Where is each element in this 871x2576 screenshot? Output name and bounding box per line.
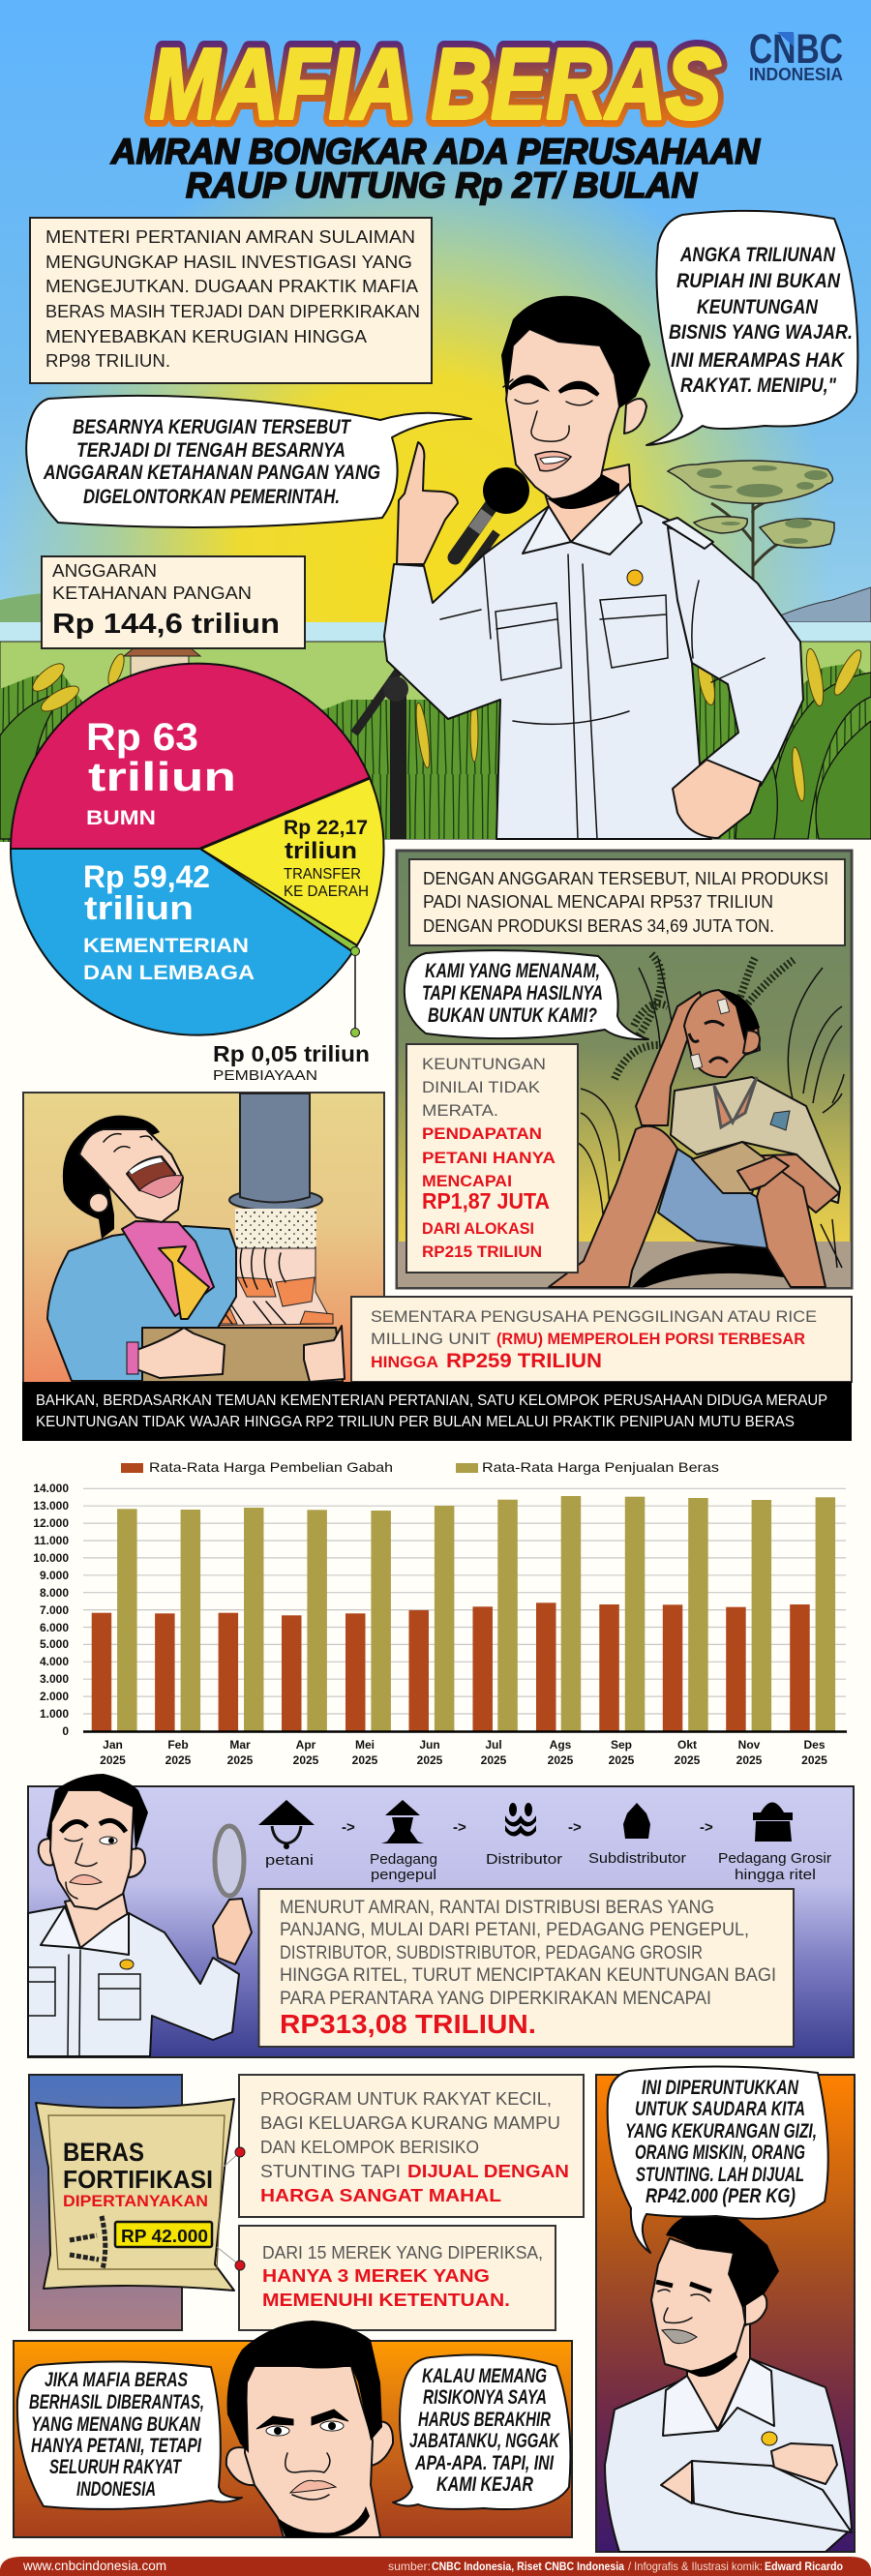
head xyxy=(684,990,760,1077)
other leg xyxy=(757,1171,826,1287)
text box: penggilingan: SEMENTARA PENGUSAHA PENGGILINGAN ATAU RICE xyxy=(371,1307,817,1326)
slice: kementerian dan lembaga xyxy=(11,849,355,1035)
x axis labels: 2025 xyxy=(736,1753,763,1767)
speech bubble: angka triliunan xyxy=(646,211,857,445)
mouth xyxy=(535,451,571,471)
speech bubble: besarnya kerugian: DIGELONTORKAN PEMERINTAH. xyxy=(83,486,340,508)
ear xyxy=(89,1193,108,1213)
panel: mafia beras diberantas xyxy=(14,2321,572,2537)
speech bubble: diperuntukkan: INI DIPERUNTUKKAN xyxy=(642,2077,799,2099)
badge xyxy=(120,1960,134,1969)
text box: rantai distribusi: PARA PERANTARA YANG DIPERKIRAKAN MENCAPAI xyxy=(280,1989,711,2009)
patch xyxy=(770,1111,790,1130)
nose xyxy=(503,379,569,441)
x axis labels: Mar xyxy=(229,1738,251,1752)
microphone stand xyxy=(354,532,496,839)
slice: pembiayaan xyxy=(200,849,370,1084)
money xyxy=(178,1248,333,1326)
x axis labels: 2025 xyxy=(801,1753,827,1767)
text box: rantai distribusi: MENURUT AMRAN, RANTAI DISTRIBUSI BERAS YANG xyxy=(280,1898,714,1918)
text box: 15 merek xyxy=(239,2226,556,2330)
black banner: temuan xyxy=(22,1382,852,1441)
text box: program rakyat kecil: DIJUAL DENGAN xyxy=(407,2161,569,2181)
minister portrait xyxy=(226,2321,393,2537)
flow icon: pedagang grosir: Pedagang Grosir xyxy=(718,1850,831,1867)
x axis labels: 2025 xyxy=(417,1753,443,1767)
eyebrows xyxy=(509,376,598,395)
text box: rantai distribusi: DISTRIBUTOR, SUBDISTRIBUTOR, PEDAGANG GROSIR xyxy=(280,1943,703,1963)
pipe xyxy=(229,1093,322,1211)
text box: program rakyat kecil: STUNTING TAPI xyxy=(260,2161,401,2181)
face xyxy=(651,2238,745,2374)
speech bubble: angka triliunan: ANGKA TRILIUNAN xyxy=(679,244,836,266)
text box: rantai distribusi: PANJANG, MULAI DARI PETANI, PEDAGANG PENGEPUL, xyxy=(280,1920,749,1940)
flow icon: pedagang pengepul xyxy=(370,1800,437,1883)
minister arms crossed xyxy=(605,2211,852,2552)
text box: program rakyat kecil: DAN KELOMPOK BERISIKO xyxy=(260,2137,479,2157)
speech bubble: angka triliunan: RUPIAH INI BUKAN xyxy=(676,270,841,292)
shirt xyxy=(122,1221,214,1316)
magnifier xyxy=(215,1826,244,1896)
eyes xyxy=(515,400,592,405)
x axis labels: 2025 xyxy=(293,1753,319,1767)
mouth xyxy=(290,2480,336,2493)
subtitle xyxy=(110,132,761,205)
text box: penggilingan xyxy=(351,1297,852,1382)
sleeve cuff xyxy=(127,1342,138,1374)
y axis labels: 8.000 xyxy=(40,1586,69,1600)
text box: keuntungan tidak merata: PENDAPATAN xyxy=(422,1124,542,1143)
speech bubble: diperuntukkan: ORANG MISKIN, ORANG xyxy=(635,2142,805,2164)
minister with magnifier xyxy=(28,1774,252,2056)
text box: keuntungan tidak merata xyxy=(406,1044,578,1273)
speech bubble: angka triliunan: INI MERAMPAS HAK xyxy=(671,349,846,372)
ears xyxy=(39,1839,145,1877)
placket xyxy=(68,1950,80,2056)
logo: CNBC Indonesia: CNBC xyxy=(749,26,843,73)
y axis labels: 9.000 xyxy=(40,1569,69,1582)
footer bar: sumber: xyxy=(388,2560,431,2573)
arrow: -> xyxy=(700,1819,713,1836)
x axis labels: Feb xyxy=(167,1738,189,1752)
x axis labels: Sep xyxy=(611,1738,632,1752)
jaw shadow xyxy=(685,2351,737,2377)
speech bubble: diperuntukkan: UNTUK SAUDARA KITA xyxy=(635,2098,805,2120)
text box: keuntungan tidak merata: DINILAI TIDAK xyxy=(422,1078,541,1096)
legend xyxy=(121,1459,719,1475)
eyes and eyebrows xyxy=(61,1820,126,1832)
rice bag: DIPERTANYAKAN xyxy=(63,2192,208,2210)
x axis labels: Jun xyxy=(419,1738,440,1752)
slice: transfer ke daerah: TRANSFER xyxy=(284,866,361,883)
price tag xyxy=(115,2222,212,2247)
hand under arm xyxy=(771,2443,837,2484)
slice: BUMN: triliun xyxy=(88,754,236,799)
text box: keuntungan tidak merata: RP1,87 JUTA xyxy=(422,1188,550,1213)
footer bar: / Infografis & Ilustrasi komik: xyxy=(628,2560,763,2573)
text box: intro: MENYEBABKAN KERUGIAN HINGGA xyxy=(45,327,367,346)
hand xyxy=(213,1899,252,1964)
text box: 15 merek: MEMENUHI KETENTUAN. xyxy=(262,2290,510,2310)
shirt body and left sleeve xyxy=(384,506,711,839)
hair xyxy=(666,2211,779,2308)
speech bubble: kalau memang: JABATANKU, NGGAK xyxy=(409,2430,560,2452)
speech bubble: diperuntukkan: RP42.000 (PER KG) xyxy=(646,2185,796,2207)
text box: intro: RP98 TRILIUN. xyxy=(45,351,170,371)
speech bubble: kami yang menanam: TAPI KENAPA HASILNYA xyxy=(422,982,603,1004)
rice plants xyxy=(0,647,871,842)
ears xyxy=(226,2421,393,2485)
rice bag: BERAS xyxy=(63,2138,144,2167)
speech bubble: kalau memang: KAMI KEJAR xyxy=(436,2473,534,2496)
ear xyxy=(743,1031,760,1053)
footer bar: www.cnbcindonesia.com xyxy=(22,2558,166,2573)
x axis labels: 2025 xyxy=(548,1753,574,1767)
x axis labels: 2025 xyxy=(675,1753,701,1767)
ear xyxy=(745,2292,766,2324)
arrow: -> xyxy=(342,1819,355,1836)
flow icon: subdistributor: Subdistributor xyxy=(588,1850,686,1867)
panel: diperuntukkan xyxy=(596,2066,855,2552)
speech bubble: jika mafia beras: HANYA PETANI, TETAPI xyxy=(31,2435,202,2457)
logo: CNBC Indonesia xyxy=(749,26,843,84)
text box: rantai distribusi: HINGGA RITEL, TURUT MENCIPTAKAN KEUNTUNGAN BAGI xyxy=(280,1965,776,1986)
callout: anggaran ketahanan pangan: Rp 144,6 triliun xyxy=(52,609,280,640)
tie xyxy=(159,1246,209,1319)
speech bubble: besarnya kerugian: TERJADI DI TENGAH BESARNYA xyxy=(76,439,345,462)
slice: kementerian dan lembaga: Rp 59,42 xyxy=(83,859,210,894)
text box: nilai produksi: PADI NASIONAL MENCAPAI RP537 TRILIUN xyxy=(423,892,773,912)
panel: rantai distribusi xyxy=(28,1774,854,2057)
speech bubble: diperuntukkan xyxy=(608,2066,828,2253)
subtitle: AMRAN BONGKAR ADA PERUSAHAAN xyxy=(110,132,761,171)
x axis labels: Jan xyxy=(103,1738,123,1752)
eyebrows and eyes xyxy=(656,2282,711,2291)
callout: anggaran ketahanan pangan: ANGGARAN xyxy=(52,561,157,581)
y axis labels: 10.000 xyxy=(33,1551,69,1565)
hills and mountain xyxy=(0,587,871,642)
text box: keuntungan tidak merata: KEUNTUNGAN xyxy=(422,1055,546,1073)
price tag: RP 42.000 xyxy=(121,2227,208,2246)
text box: penggilingan: HINGGA xyxy=(371,1353,438,1371)
text box: program rakyat kecil: BAGI KELUARGA KURANG MAMPU xyxy=(260,2112,560,2133)
y axis labels: 6.000 xyxy=(40,1621,69,1634)
face xyxy=(50,1790,134,1909)
flow icon: pedagang grosir xyxy=(718,1802,831,1883)
slice: transfer ke daerah: KE DAERAH xyxy=(284,884,369,900)
x axis labels: 2025 xyxy=(227,1753,254,1767)
speech bubble: jika mafia beras: YANG MENANG BUKAN xyxy=(31,2413,201,2436)
collar xyxy=(41,1906,129,1955)
speech bubble: diperuntukkan: STUNTING. LAH DIJUAL xyxy=(636,2164,804,2186)
speech bubble: besarnya kerugian xyxy=(26,396,471,527)
slice: pembiayaan: Rp 0,05 triliun xyxy=(213,1041,370,1066)
connector dots xyxy=(217,2147,245,2270)
text box: program rakyat kecil: HARGA SANGAT MAHAL xyxy=(260,2185,501,2205)
hair xyxy=(501,296,650,408)
legend: Rata-Rata Harga Penjualan Beras xyxy=(482,1459,719,1475)
title: Mafia Beras: MAFIA BERAS xyxy=(150,28,721,139)
shirt xyxy=(28,1906,239,2056)
text box: penggilingan: (RMU) MEMPEROLEH PORSI TERBESAR xyxy=(496,1330,805,1348)
falling rice xyxy=(235,1209,316,1282)
speech bubble: jika mafia beras: JIKA MAFIA BERAS xyxy=(45,2369,188,2391)
face xyxy=(506,329,619,506)
y axis labels: 1.000 xyxy=(40,1707,69,1721)
x axis labels: 2025 xyxy=(100,1753,126,1767)
flow icon: distributor xyxy=(486,1803,562,1868)
forearm xyxy=(636,992,704,1125)
text box: intro: MENGEJUTKAN. DUGAAN PRAKTIK MAFIA xyxy=(45,277,418,296)
callout: anggaran ketahanan pangan: KETAHANAN PANGAN xyxy=(52,584,252,603)
speech bubble: kalau memang: HARUS BERAKHIR xyxy=(418,2409,552,2431)
text box: intro: BERAS MASIH TERJADI DAN DIPERKIRAKAN xyxy=(45,302,420,321)
panel: hero scene background xyxy=(0,0,871,842)
x axis labels: Mei xyxy=(355,1738,375,1752)
slice: kementerian dan lembaga: DAN LEMBAGA xyxy=(83,962,255,984)
x axis labels: Des xyxy=(803,1738,826,1752)
pie chart: anggaran xyxy=(11,664,384,1084)
title: Mafia Beras: MAFIA BERAS xyxy=(150,28,721,139)
mouth xyxy=(662,2329,697,2344)
rock xyxy=(632,1245,791,1287)
y axis labels: 3.000 xyxy=(40,1672,69,1686)
right arm xyxy=(736,1154,839,1213)
collar xyxy=(663,2358,774,2436)
text box: keuntungan tidak merata: RP215 TRILIUN xyxy=(422,1243,542,1261)
arrow: -> xyxy=(568,1819,582,1836)
y axis labels: 5.000 xyxy=(40,1637,69,1651)
callout: anggaran ketahanan pangan xyxy=(42,556,305,648)
y axis labels: 7.000 xyxy=(40,1603,69,1617)
x axis labels xyxy=(100,1738,827,1767)
speech bubble: kami yang menanam: KAMI YANG MENANAM, xyxy=(425,960,600,982)
speech bubble: besarnya kerugian: ANGGARAN KETAHANAN PANGAN YANG xyxy=(43,462,380,484)
neck xyxy=(542,464,631,542)
slice: kementerian dan lembaga: KEMENTERIAN xyxy=(83,935,249,957)
speech bubble: jika mafia beras: BERHASIL DIBERANTAS, xyxy=(29,2391,204,2413)
x axis labels: 2025 xyxy=(481,1753,507,1767)
minister illustration xyxy=(384,296,803,839)
nose xyxy=(285,2453,330,2472)
rice field ground xyxy=(0,642,871,839)
x axis labels: Okt xyxy=(677,1738,697,1752)
footer bar: CNBC Indonesia, Riset CNBC Indonesia xyxy=(432,2560,624,2573)
flow icon: pedagang grosir: hingga ritel xyxy=(735,1867,816,1883)
text box: intro: MENTERI PERTANIAN AMRAN SULAIMAN xyxy=(45,227,415,247)
flow icon: petani xyxy=(258,1800,315,1869)
panel: petani xyxy=(397,851,852,1288)
text box: keuntungan tidak merata: DARI ALOKASI xyxy=(422,1219,534,1238)
eyebrows xyxy=(256,2410,348,2429)
speech bubble: jika mafia beras: INDONESIA xyxy=(76,2478,156,2501)
crossed forearm xyxy=(692,2461,852,2532)
ear xyxy=(624,399,646,434)
flow icon: distributor: Distributor xyxy=(486,1851,562,1868)
text box: program rakyat kecil xyxy=(239,2075,584,2217)
hair xyxy=(46,1774,148,1851)
house xyxy=(124,643,200,675)
flow icon: subdistributor xyxy=(588,1803,686,1867)
shirt xyxy=(671,1077,840,1203)
arrow: -> xyxy=(453,1819,466,1836)
slice: transfer ke daerah: triliun xyxy=(285,838,357,864)
eyes xyxy=(104,1134,152,1152)
text box: keuntungan tidak merata: PETANI HANYA xyxy=(422,1149,556,1167)
neck xyxy=(687,2322,750,2429)
text box: nilai produksi xyxy=(409,859,845,945)
speech bubble: kalau memang: APA-APA. TAPI, INI xyxy=(414,2452,555,2474)
collar xyxy=(523,484,642,554)
x axis labels: 2025 xyxy=(609,1753,635,1767)
y axis labels: 11.000 xyxy=(34,1534,69,1547)
text box: penggilingan: MILLING UNIT xyxy=(371,1330,491,1348)
x axis labels: Ags xyxy=(550,1738,572,1752)
face xyxy=(79,1129,183,1222)
raised leg xyxy=(549,1126,677,1287)
speech bubble: angka triliunan: RAKYAT. MENIPU," xyxy=(680,374,837,397)
rice bag: FORTIFIKASI xyxy=(63,2165,213,2194)
speech bubble: angka triliunan: KEUNTUNGAN xyxy=(697,296,819,318)
badge xyxy=(627,570,643,585)
text box: rantai distribusi: RP313,08 TRILIUN. xyxy=(280,2009,536,2039)
x axis labels: 2025 xyxy=(165,1753,192,1767)
speech bubble: kalau memang xyxy=(393,2354,570,2509)
face details xyxy=(689,1021,728,1063)
speech bubble: kami yang menanam: BUKAN UNTUK KAMI? xyxy=(428,1004,597,1027)
hand on book xyxy=(737,1156,789,1190)
series: pembelian gabah xyxy=(92,1603,810,1731)
flow icon: pedagang pengepul: pengepul xyxy=(371,1867,436,1883)
speech bubble: kalau memang: RISIKONYA SAYA xyxy=(423,2386,547,2409)
y axis labels: 4.000 xyxy=(40,1655,69,1668)
speech bubble: besarnya kerugian: BESARNYA KERUGIAN TERSEBUT xyxy=(73,416,352,438)
jaw shadow xyxy=(547,474,619,509)
x axis labels: Apr xyxy=(296,1738,316,1752)
open mouth xyxy=(127,1156,175,1193)
footer bar: Edward Ricardo xyxy=(765,2560,843,2573)
series: penjualan beras xyxy=(117,1496,835,1731)
hands xyxy=(136,1328,225,1378)
neckline xyxy=(714,1077,757,1127)
speech bubble: kami yang menanam xyxy=(405,950,648,1039)
speech bubble: kalau memang: KALAU MEMANG xyxy=(422,2365,547,2387)
legend: Rata-Rata Harga Pembelian Gabah xyxy=(149,1459,393,1475)
speech bubble: jika mafia beras: SELURUH RAKYAT xyxy=(49,2456,183,2478)
flow icon: pedagang pengepul: Pedagang xyxy=(370,1851,437,1868)
nose xyxy=(664,2308,692,2322)
y axis labels: 13.000 xyxy=(33,1499,69,1513)
slice: BUMN: BUMN xyxy=(86,807,156,829)
black banner: temuan: BAHKAN, BERDASARKAN TEMUAN KEMENTERIAN PERTANIAN, SATU KELOMPOK PERUSAHAAN DIDUGA MERAUP xyxy=(36,1393,827,1409)
x axis labels: 2025 xyxy=(352,1753,378,1767)
shirt xyxy=(605,2358,852,2552)
y axis labels: 2.000 xyxy=(40,1690,69,1703)
slice: kementerian dan lembaga: triliun xyxy=(84,890,194,927)
tongue xyxy=(139,1176,183,1198)
slice: BUMN xyxy=(11,664,370,849)
subtitle: RAUP UNTUNG Rp 2T/ BULAN xyxy=(186,165,698,205)
slice: transfer ke daerah: Rp 22,17 xyxy=(284,817,368,839)
rice bag xyxy=(36,2099,234,2291)
footer bar xyxy=(0,2557,871,2576)
y axis labels: 14.000 xyxy=(33,1482,69,1495)
right hand xyxy=(673,760,761,838)
hair xyxy=(227,2321,382,2453)
text box: penggilingan: RP259 TRILIUN xyxy=(446,1350,602,1372)
text box: intro xyxy=(30,218,432,383)
neck xyxy=(65,1892,129,1948)
book xyxy=(692,1142,765,1193)
text box: keuntungan tidak merata: MERATA. xyxy=(422,1101,498,1120)
jacket xyxy=(47,1226,236,1381)
shirt placket and creases xyxy=(440,554,765,839)
logo: CNBC Indonesia: INDONESIA xyxy=(749,65,843,84)
text box: nilai produksi: DENGAN PRODUKSI BERAS 34,69 JUTA TON. xyxy=(423,916,774,936)
ground xyxy=(398,1242,851,1287)
panel: pengusaha xyxy=(23,1093,384,1383)
panel: beras fortifikasi xyxy=(29,2075,234,2330)
y axis labels: 0 xyxy=(62,1724,69,1738)
y axis labels: 12.000 xyxy=(33,1516,69,1530)
farmer illustration xyxy=(549,990,840,1288)
slice: BUMN: Rp 63 xyxy=(86,716,198,759)
slice: pembiayaan: PEMBIAYAAN xyxy=(213,1067,317,1084)
pockets xyxy=(28,1967,140,2020)
microphone xyxy=(455,467,529,557)
hair xyxy=(63,1116,160,1239)
badge xyxy=(762,2432,777,2445)
text box: program rakyat kecil: PROGRAM UNTUK RAKYAT KECIL, xyxy=(260,2088,552,2109)
flow icon: petani: petani xyxy=(265,1852,314,1869)
x axis labels: Nov xyxy=(738,1738,761,1752)
text box: rantai distribusi xyxy=(259,1889,794,2047)
hair xyxy=(719,990,760,1045)
epaulet xyxy=(663,518,713,549)
raised hand xyxy=(397,442,458,564)
nose and mouth xyxy=(66,1843,97,1899)
shorts xyxy=(658,1149,767,1248)
shirt pockets xyxy=(496,595,668,680)
eyes xyxy=(266,2426,289,2436)
jaw shadow xyxy=(278,2506,370,2537)
speech bubble: jika mafia beras xyxy=(17,2361,242,2509)
rice sprig xyxy=(70,2216,105,2269)
x axis labels: Jul xyxy=(485,1738,502,1752)
black banner: temuan: KEUNTUNGAN TIDAK WAJAR HINGGA RP2 TRILIUN PER BULAN MELALUI PRAKTIK PENIPUAN MUTU BERAS xyxy=(36,1414,795,1430)
text box: keuntungan tidak merata: MENCAPAI xyxy=(422,1172,512,1190)
background rice stalks xyxy=(576,953,844,1268)
businessman illustration xyxy=(47,1116,345,1382)
box xyxy=(142,1328,343,1382)
text box: intro: MENGUNGKAP HASIL INVESTIGASI YANG xyxy=(45,253,412,272)
text box: 15 merek: DARI 15 MEREK YANG DIPERIKSA, xyxy=(262,2242,543,2262)
bar chart: harga gabah dan beras xyxy=(33,1459,847,1767)
face xyxy=(245,2366,380,2537)
acacia tree xyxy=(668,461,834,584)
text box: nilai produksi: DENGAN ANGGARAN TERSEBUT, NILAI PRODUKSI xyxy=(423,869,828,888)
text box: 15 merek: HANYA 3 MEREK YANG xyxy=(262,2265,490,2286)
right arm xyxy=(668,527,803,786)
y axis labels xyxy=(33,1482,69,1738)
slice: transfer ke daerah xyxy=(200,778,384,948)
